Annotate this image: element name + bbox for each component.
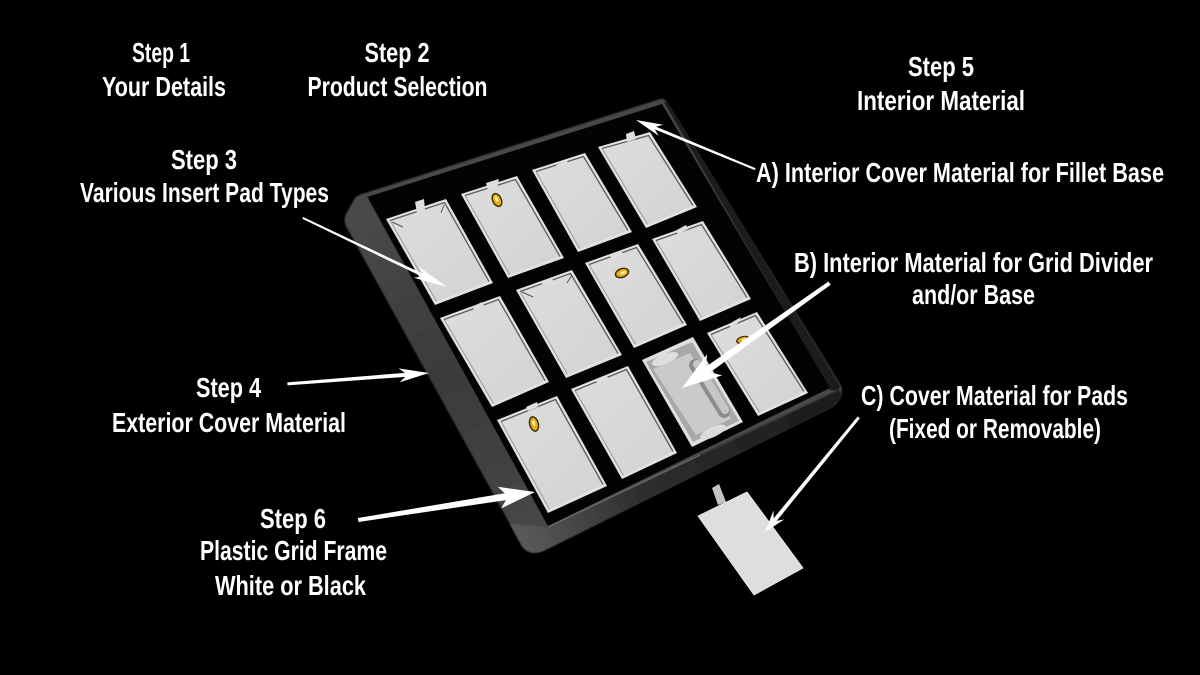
step 5 label	[857, 51, 1025, 116]
arrow: step 4 to exterior	[287, 366, 430, 391]
empty pad well	[642, 337, 743, 447]
step 2 label: Step 2	[364, 37, 430, 68]
tray outer shell	[345, 99, 842, 553]
step 1 label	[102, 37, 226, 102]
step 2 label: Product Selection	[308, 71, 488, 102]
step 1 label: Step 1	[132, 37, 190, 68]
step 6 label: Plastic Grid Frame	[200, 535, 387, 566]
step 6 label	[200, 503, 387, 601]
step 3 label	[80, 144, 329, 208]
step 6 label: Step 6	[260, 503, 326, 534]
arrow: C to loose pad	[760, 413, 864, 536]
pad body	[698, 492, 803, 595]
pad creases	[392, 205, 572, 297]
label B: and/or Base	[912, 279, 1035, 310]
label B	[794, 247, 1153, 310]
pad row 3	[497, 312, 808, 513]
step 6 label: White or Black	[215, 570, 367, 601]
arrow: A to fillet base	[634, 114, 758, 175]
arrow: step 3 to pad	[300, 212, 450, 292]
step 1 label: Your Details	[102, 71, 226, 102]
step 4 label	[112, 372, 346, 438]
step 5 label: Step 5	[908, 51, 974, 82]
removable cover pad	[698, 484, 803, 595]
label C	[861, 380, 1128, 444]
pad row 1	[386, 132, 697, 305]
arrow: step 6 to plastic frame	[356, 481, 537, 531]
tray interior floor	[367, 104, 830, 526]
tray front face	[510, 390, 842, 553]
label C: (Fixed or Removable)	[889, 413, 1101, 444]
yellow gemstones	[489, 191, 751, 433]
step 4 label: Step 4	[196, 372, 262, 403]
step 3 label: Step 3	[171, 144, 237, 175]
pad row 2	[440, 221, 751, 407]
pad tab	[712, 484, 726, 505]
jewelry tray	[345, 99, 842, 553]
tray right rim	[664, 102, 840, 391]
step 2 label	[308, 37, 488, 102]
step 4 label: Exterior Cover Material	[112, 407, 346, 438]
interior edge highlights	[367, 197, 838, 527]
step 3 label: Various Insert Pad Types	[80, 177, 329, 208]
arrow: B to grid divider	[674, 273, 837, 399]
insert pads	[386, 131, 808, 513]
pad hooks	[415, 131, 741, 411]
step 5 label: Interior Material	[857, 85, 1025, 116]
label C: C) Cover Material for Pads	[861, 380, 1128, 411]
